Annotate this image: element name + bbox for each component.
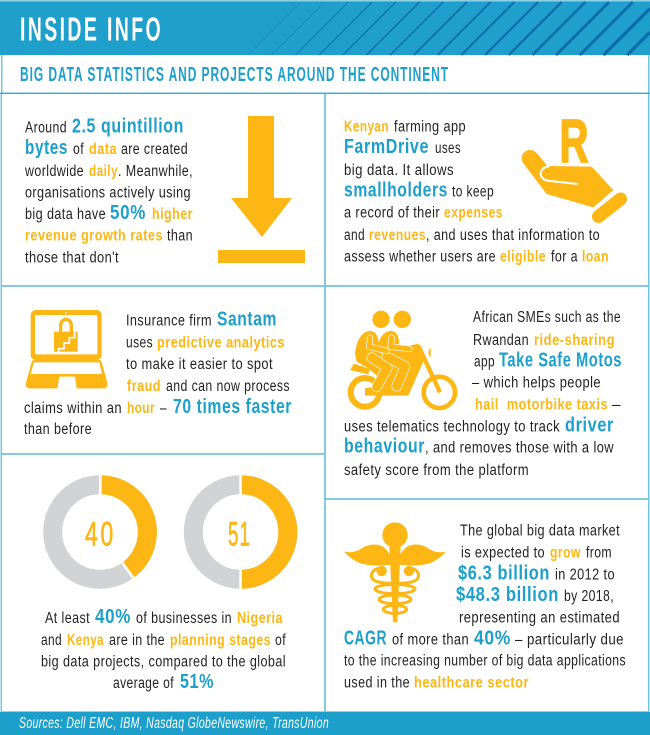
text: data statistics: data — [89, 141, 117, 158]
text: FarmDrive description: a record of their — [344, 205, 440, 222]
text: planning stages description: At least — [45, 610, 90, 627]
text: Take Safe Motos description: safety score from the platform — [344, 462, 529, 479]
text: big data market description: used in the — [344, 675, 410, 692]
text: Take Safe Motos description: behaviour — [344, 435, 425, 458]
text: Santam description: hour — [127, 400, 155, 417]
text: planning stages description: Kenya — [67, 632, 104, 649]
text: Take Safe Motos description: ride-sharing — [534, 332, 615, 349]
text: Santam description: – — [160, 400, 167, 417]
text: FarmDrive description: to keep — [452, 184, 494, 201]
text: FarmDrive description — [344, 119, 609, 266]
text: planning stages description: 40% — [95, 605, 131, 628]
header divider — [0, 92, 650, 94]
donut chart: 40 — [53, 473, 147, 580]
text: planning stages description: of — [275, 632, 286, 649]
icon: hand holding rand symbol: R — [560, 107, 588, 175]
text: FarmDrive description: smallholders — [344, 179, 448, 202]
text: Santam description: uses — [126, 335, 153, 352]
text: FarmDrive description: expenses — [444, 205, 503, 222]
text: data statistics: worldwide — [24, 163, 84, 180]
donut chart: 51 — [193, 473, 288, 591]
text: big data market description — [344, 523, 626, 692]
text: Take Safe Motos description: – which helps people — [472, 375, 601, 392]
text: Take Safe Motos description: Rwandan — [473, 332, 529, 349]
panel: data growth — [1, 93, 325, 286]
text: planning stages description: and — [41, 632, 62, 649]
text: planning stages description: 51% — [180, 670, 214, 693]
text: Santam description: fraud — [127, 378, 161, 395]
text: Santam description: than before — [24, 421, 92, 438]
panel: Santam — [1, 286, 325, 454]
text: big data market description: in 2012 to — [555, 566, 615, 583]
text: FarmDrive description: loan — [582, 249, 609, 266]
icon: two riders on motorbike — [350, 311, 455, 408]
text: big data market description: 40% — [474, 626, 511, 649]
text: data statistics: are created — [121, 141, 188, 158]
text: planning stages description: of businesses in — [136, 610, 232, 627]
text: data statistics: 2.5 quintillion — [72, 115, 184, 138]
text: Take Safe Motos description: , and removes those with a low — [425, 440, 614, 457]
text: FarmDrive description: revenues — [369, 227, 426, 244]
header banner — [0, 0, 650, 55]
panel: big data market — [325, 499, 649, 712]
text: Santam description: predictive analytics — [157, 335, 285, 352]
text: Take Safe Motos description — [344, 309, 622, 479]
panel: FarmDrive — [325, 93, 649, 286]
text: big data market description: CAGR — [344, 626, 387, 649]
text: data statistics: 50% — [110, 201, 146, 224]
text: Take Safe Motos description: hail motorbike taxis — [475, 397, 608, 414]
text: Take Safe Motos description: driver — [565, 414, 614, 437]
text: big data market description: healthcare sector — [414, 675, 529, 692]
text: big data market description: $48.3 billion — [456, 583, 559, 606]
text: FarmDrive description: uses — [435, 140, 461, 157]
text: planning stages description: big data projects, compared to the global — [41, 654, 286, 671]
text: FarmDrive description: , and uses that information to — [426, 227, 600, 244]
title: INSIDE INFO — [20, 11, 163, 48]
text: big data market description: by 2018, — [564, 588, 614, 605]
text: data statistics — [24, 115, 193, 267]
text: FarmDrive description: eligible — [500, 249, 546, 266]
text: data statistics: . Meanwhile, — [118, 163, 193, 180]
text: data statistics: bytes — [25, 136, 68, 159]
text: planning stages description: Nigeria — [237, 610, 283, 627]
panel: planning stages — [1, 454, 325, 712]
icon: download arrow — [218, 116, 305, 263]
text: Santam description — [24, 308, 292, 438]
text: data statistics: those that don't — [25, 250, 119, 267]
text: data statistics: than — [167, 228, 193, 245]
text: data statistics: of — [73, 141, 84, 158]
text: big data market description: of more than — [392, 631, 469, 648]
footer: sources — [0, 712, 650, 735]
text: Santam description: and can now process — [166, 378, 290, 395]
text: data statistics: big data have — [25, 206, 106, 223]
text: big data market description: from — [586, 545, 612, 562]
text: big data market description: representing an estimated — [459, 610, 620, 627]
donut chart: 40: 40 — [85, 516, 116, 554]
text: Take Safe Motos description: – — [612, 397, 621, 414]
text: Take Safe Motos description: app — [474, 354, 495, 371]
text: planning stages description — [41, 605, 286, 693]
footer: sources: Sources: Dell EMC, IBM, Nasdaq GlobeNewswire, TransUnion — [19, 715, 329, 732]
text: FarmDrive description: and — [344, 227, 365, 244]
text: data statistics: Around — [25, 120, 67, 137]
text: big data market description: – particularly due — [515, 631, 624, 648]
text: planning stages description: are in the — [109, 632, 165, 649]
icon: hand holding rand symbol — [522, 107, 620, 216]
text: big data market description: $6.3 billion — [458, 561, 550, 584]
text: data statistics: revenue growth rates — [25, 228, 163, 245]
text: Santam description: claims within an — [24, 400, 122, 417]
text: big data market description: is expected to — [461, 545, 545, 562]
icon: caduceus — [344, 522, 446, 622]
text: FarmDrive description: Kenyan — [344, 119, 389, 136]
text: Santam description: Santam — [217, 308, 277, 331]
text: data statistics: organisations actively using — [25, 185, 191, 202]
text: Santam description: to make it easier to spot — [126, 356, 273, 373]
text: FarmDrive description: assess whether users are — [344, 249, 496, 266]
donut chart: 51: 51 — [228, 516, 251, 554]
text: data statistics: higher — [152, 206, 193, 223]
text: Santam description: 70 times faster — [173, 395, 292, 418]
panel: Take Safe Motos — [325, 286, 649, 499]
text: FarmDrive description: for a — [551, 249, 578, 266]
text: planning stages description: planning stages — [170, 632, 271, 649]
text: data statistics: daily — [89, 163, 118, 180]
text: FarmDrive description: farming app — [394, 119, 466, 136]
text: Santam description: Insurance firm — [126, 313, 212, 330]
text: FarmDrive description: big data. It allows — [344, 162, 454, 179]
text: planning stages description: average of — [113, 675, 174, 692]
text: Take Safe Motos description: uses telematics technology to track — [344, 419, 560, 436]
icon: laptop with padlock — [26, 310, 107, 388]
text: big data market description: grow — [550, 545, 581, 562]
text: FarmDrive description: FarmDrive — [344, 135, 429, 158]
